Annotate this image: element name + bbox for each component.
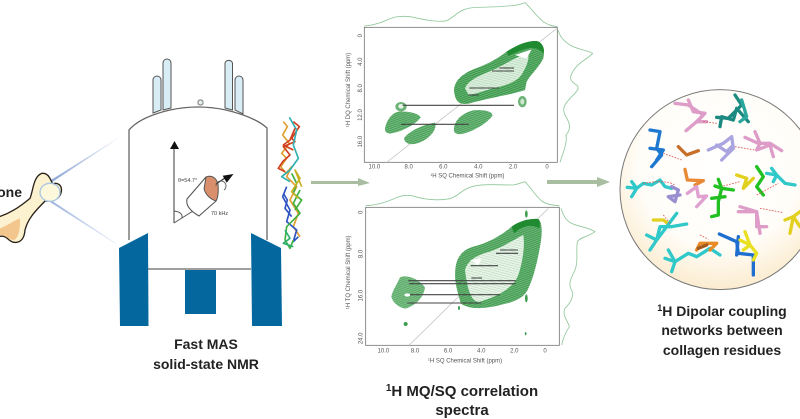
tick labels: 2.0: [510, 348, 519, 354]
angle label: θ=54.7°: [178, 178, 197, 184]
magnified spot on bone: [40, 183, 60, 201]
left leg: [119, 233, 148, 326]
heading: dipolar coupling networks: networks between: [661, 322, 783, 338]
cryogen tubes: [153, 59, 243, 114]
spectrum: DQ/SQ correlation: [345, 3, 593, 180]
plot frame: [364, 27, 557, 162]
y tick labels: 24.0: [358, 332, 364, 344]
spinning rate label: 70 kHz: [211, 211, 228, 217]
heading: MQ/SQ correlation spectra: H MQ/SQ correlation: [391, 383, 538, 400]
dipolar coupling dashes: [643, 122, 783, 239]
tick labels: 8.0: [411, 348, 420, 354]
y tick labels: 16.0: [358, 289, 364, 301]
heading: dipolar coupling networks: [657, 303, 787, 358]
y tick labels: 8.0: [358, 249, 364, 258]
x axis title: H SQ Chemical Shift (ppm): [430, 358, 502, 364]
heading: MQ/SQ correlation spectra: 1: [386, 383, 392, 394]
diagonal: [409, 208, 548, 345]
collagen triple helix: [278, 117, 302, 248]
arrow: to residues: [547, 177, 610, 187]
bone shading: [0, 218, 20, 240]
heading: Fast MAS solid-state NMR: solid-state NMR: [153, 356, 259, 372]
bone illustration with magnified beams: [0, 137, 119, 244]
top port: [198, 100, 203, 105]
NMR magnet: [119, 59, 282, 326]
tick labels: 4.0: [474, 165, 483, 171]
y tick labels: 0: [358, 33, 364, 37]
tick labels: [378, 348, 547, 354]
heading: MQ/SQ correlation spectra: [386, 383, 538, 419]
y tick labels: [358, 210, 364, 344]
y tick labels: 8.0: [358, 84, 364, 92]
x axis title: H SQ Chemical Shift (ppm): [432, 174, 504, 180]
x axis title: 1: [428, 358, 430, 362]
heading: MQ/SQ correlation spectra: spectra: [435, 402, 489, 419]
bone shape: [0, 173, 61, 242]
tick labels: 4.0: [477, 348, 486, 354]
base line: [148, 268, 251, 270]
y tick labels: 12.0: [358, 109, 364, 121]
tick labels: 0: [545, 165, 549, 171]
heading: Fast MAS solid-state NMR: Fast MAS: [174, 336, 238, 352]
centre block: [185, 270, 216, 314]
beam lines towards magnet: [49, 137, 119, 244]
spectrum: TQ/SQ correlation: [345, 182, 595, 364]
tick labels: 2.0: [509, 165, 518, 171]
y tick labels: 16.0: [358, 135, 364, 147]
heading: Fast MAS solid-state NMR: [153, 336, 259, 372]
spinning rotor at magic angle: [174, 174, 234, 223]
circle background: [620, 90, 800, 290]
y axis title: H TQ Chemical Shift (ppm): [346, 235, 352, 307]
tick labels: 0: [543, 348, 547, 354]
lower contour peaks: [385, 96, 527, 144]
heading: dipolar coupling networks: 1: [657, 303, 662, 313]
B0 field arrow: [170, 141, 179, 223]
main contour peak: [454, 41, 544, 104]
projection traces: [366, 182, 595, 345]
minor cross peaks: [404, 210, 528, 335]
projection traces: [364, 3, 593, 162]
tick labels: 10.0: [369, 165, 381, 171]
arrow: to spectra: [311, 178, 370, 186]
tick labels: 6.0: [444, 348, 453, 354]
heading: dipolar coupling networks: H Dipolar coupling: [662, 303, 787, 319]
y tick labels: 0: [358, 210, 364, 214]
y axis title: 1: [345, 125, 349, 127]
circle: collagen residue network: [620, 90, 800, 290]
correlation lines: [401, 68, 514, 124]
side contour peak: [391, 276, 425, 309]
tick labels: 10.0: [378, 348, 390, 354]
main contour peak: [455, 219, 542, 308]
y tick labels: [358, 33, 364, 147]
heading: dipolar coupling networks: collagen residues: [663, 342, 781, 358]
y axis title: H DQ Chemical Shift (ppm): [346, 53, 352, 125]
tick labels: [369, 165, 549, 171]
x axis title: 1: [430, 173, 432, 177]
plot frame: [366, 207, 559, 345]
diagonal: [387, 28, 557, 162]
right leg: [251, 233, 282, 326]
y axis title: 1: [345, 307, 349, 309]
tick labels: 6.0: [439, 165, 448, 171]
residue sticks: [627, 95, 800, 275]
tick labels: 8.0: [405, 165, 413, 171]
y tick labels: 4.0: [358, 57, 364, 66]
magnet body: [129, 107, 267, 240]
correlation lines: [407, 250, 518, 303]
